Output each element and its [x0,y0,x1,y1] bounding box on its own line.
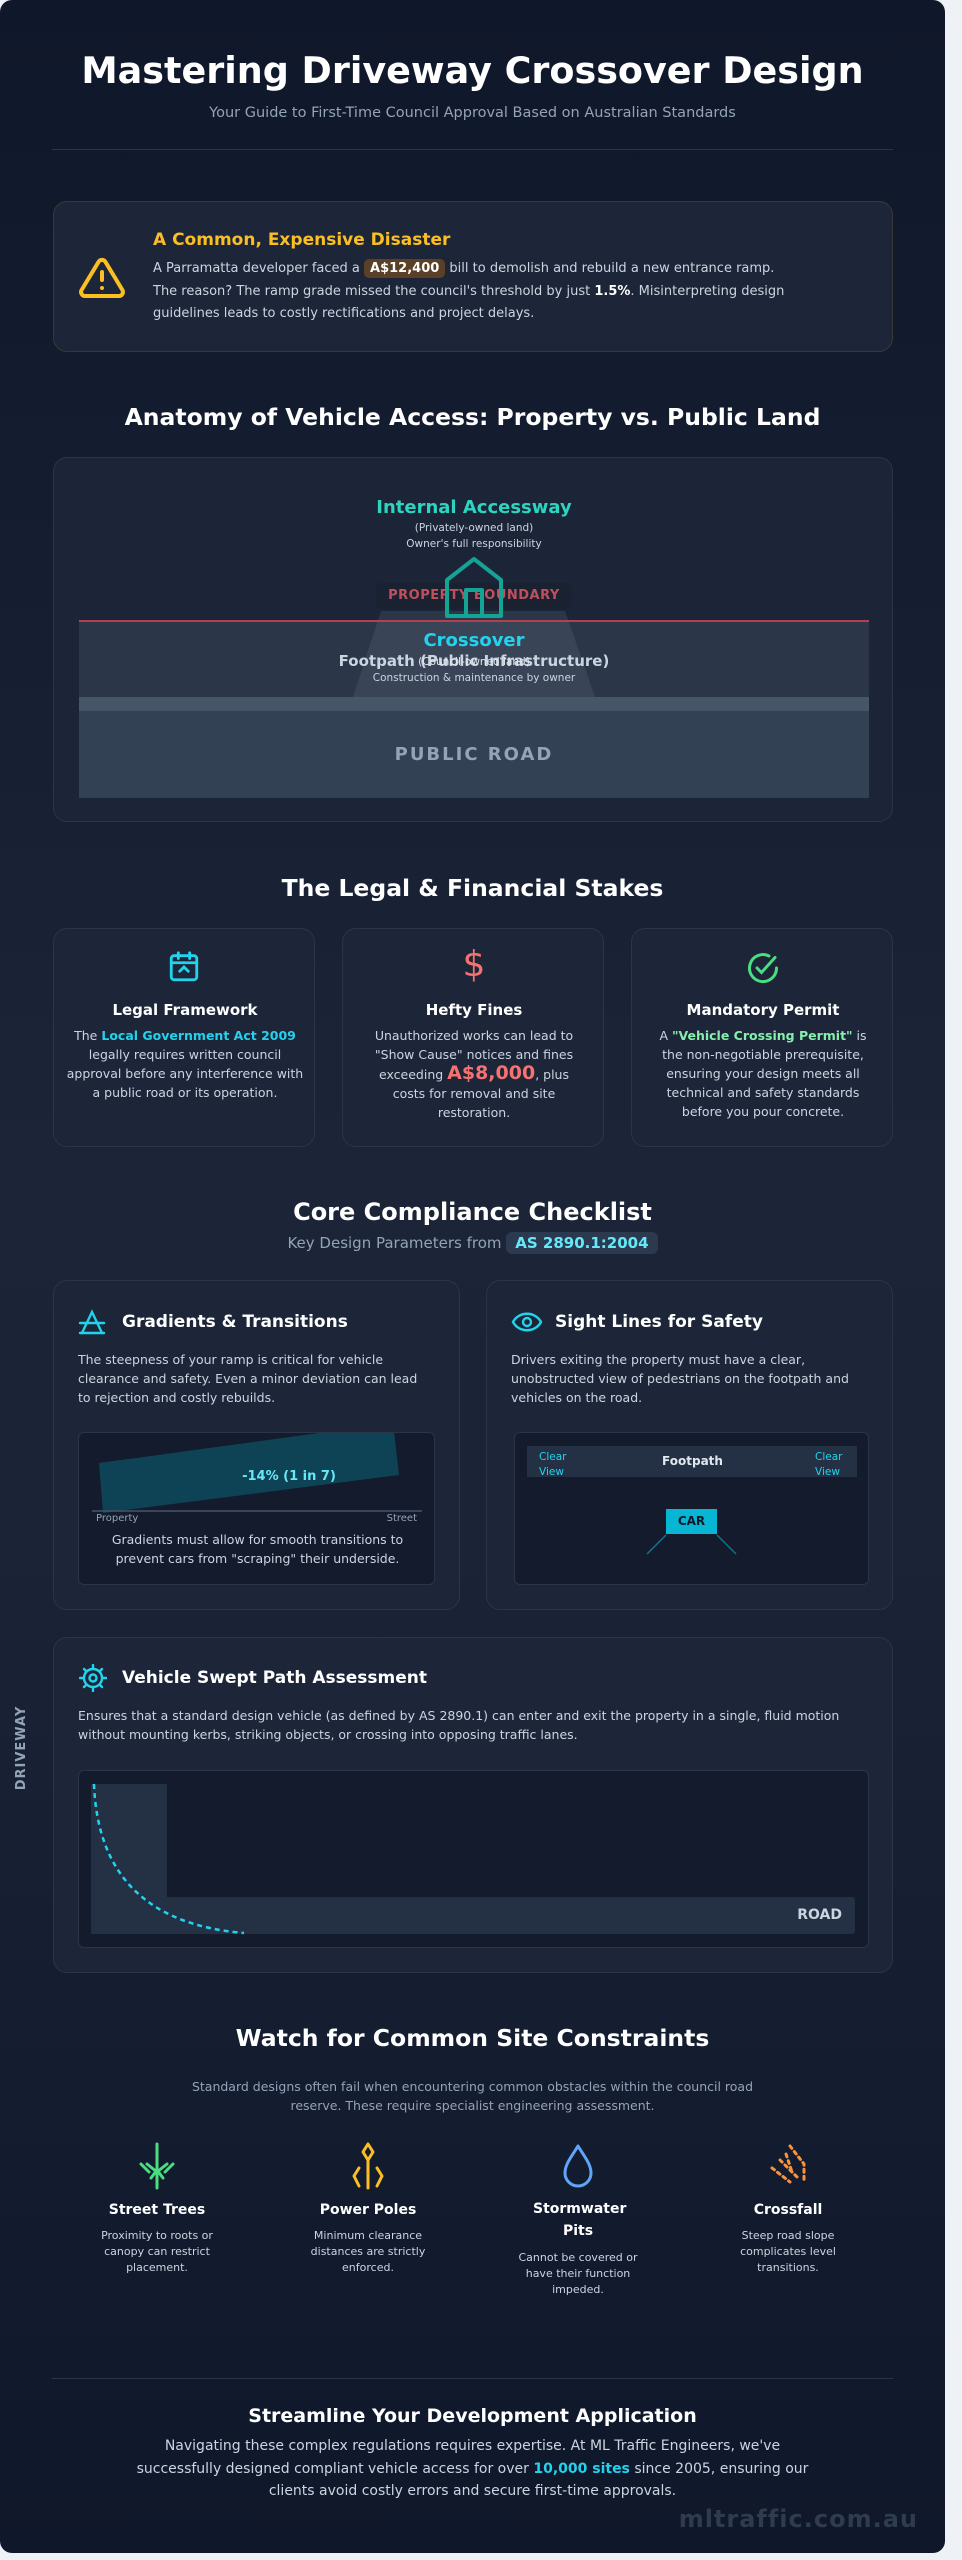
constraint: stormwater pits: Stormwater Pits [533,2201,626,2239]
panel: sight lines [486,1280,893,1610]
icon: house [445,557,503,618]
gradient diagram: -14% (1 in 7) [242,1469,336,1484]
constraint: street trees [101,2142,213,2274]
constraint: power poles: Power Poles [320,2202,416,2218]
icon: check circle [748,953,778,984]
subtitle: Your Guide to First-Time Council Approval Based on Australian Standards [209,105,736,121]
panel: swept path: Vehicle Swept Path Assessment [122,1668,427,1688]
sight diagram: Footpath [662,1454,723,1468]
footer text [137,2438,808,2499]
panel: legal framework: The Local Government Act 2009 legally requires written council approval before any interference with a public road or its operation. [67,1028,303,1100]
public road: PUBLIC ROAD [395,744,553,765]
heading: legal stakes: The Legal & Financial Stakes [282,874,663,902]
gradient diagram: Property [96,1513,138,1524]
constraint: crossfall: Steep road slope complicates level transitions. [740,2229,836,2274]
subheading with badge: Key Design Parameters from AS 2890.1:2004 [287,1234,649,1252]
crossover label: Crossover [423,630,525,651]
alert panel [53,201,893,352]
constraint: power poles: Minimum clearance distances are strictly enforced. [311,2229,425,2274]
swept path diagram [78,1770,869,1948]
constraint: stormwater pits: Cannot be covered or have their function impeded. [518,2251,638,2296]
panel: mandatory permit [631,928,893,1147]
property boundary label [376,583,572,609]
gradient diagram: Street [387,1513,417,1524]
panel: mandatory permit: Mandatory Permit [687,1001,839,1019]
internal accessway label [376,497,572,550]
panel: swept path [53,1637,893,1973]
icon: calendar [170,951,198,982]
panel: gradients: The steepness of your ramp is critical for vehicle clearance and safety. Even a minor deviation can lead to rejection and costly rebuilds. [78,1352,417,1405]
sight diagram: Clear [539,1451,566,1463]
panel: anatomy diagram [53,457,893,822]
footer text: Navigating these complex regulations requires expertise. At ML Traffic Engineers, we've [165,2438,780,2454]
constraint: stormwater pits [518,2144,638,2296]
panel: legal framework: Legal Framework [112,1001,258,1019]
public road [79,711,869,798]
sight diagram [514,1432,869,1585]
vertical driveway label: DRIVEWAY [14,1706,29,1790]
watermark: mltraffic.com.au [679,2505,918,2533]
crossover trapezoid [353,611,595,697]
panel: hefty fines [342,928,604,1147]
panel: swept path: Ensures that a standard design vehicle (as defined by AS 2890.1) can enter and exit the property in a single, fluid motion without mounting kerbs, striking objects, or crossing into opposing traffic lanes. [78,1708,839,1742]
footer text: successfully designed compliant vehicle access for over 10,000 sites since 2005, ensuring our clients avoid costly errors and secure first-time approvals. [137,2460,808,2499]
gradient diagram: Gradients must allow for smooth transitions to prevent cars from "scraping" their underside. [112,1532,403,1566]
constraints intro: Standard designs often fail when encountering common obstacles within the council road reserve. These require specialist engineering assessment. [192,2079,753,2113]
icon: gradient [78,1309,106,1334]
panel: gradients: Gradients & Transitions [122,1312,348,1332]
panel: anatomy diagram: Construction & maintenance by owner [373,672,575,684]
panel: gradients [53,1280,460,1610]
internal accessway label: Owner's full responsibility [406,538,542,550]
footer heading: Streamline Your Development Application [248,2405,697,2427]
constraint: crossfall [740,2144,836,2274]
panel: hefty fines: Hefty Fines [426,1001,522,1019]
icon: warning [79,258,125,298]
constraint: street trees: Street Trees [109,2202,205,2218]
heading: site constraints: Watch for Common Site Constraints [236,2024,709,2052]
constraint: power poles [311,2142,425,2274]
icon: gear [79,1664,107,1692]
footpath label: Footpath (Public Infrastructure) [339,652,609,670]
panel: legal framework [53,928,315,1147]
panel: anatomy diagram: (Council-owned land) [418,656,530,668]
property boundary line [79,620,869,622]
constraint: street trees: Proximity to roots or canopy can restrict placement. [101,2229,213,2274]
alert text [152,259,784,321]
icon: eye [512,1312,542,1332]
heading: compliance checklist: Core Compliance Checklist [293,1198,652,1226]
swept path diagram: ROAD [797,1907,842,1923]
constraint: crossfall: Crossfall [754,2202,822,2218]
panel: sight lines: Sight Lines for Safety [555,1312,763,1332]
curb [79,697,869,711]
alert text: The reason? The ramp grade missed the council's threshold by just 1.5%. Misinterpreting design guidelines leads to costly rectifications and project delays. [153,284,784,321]
panel: sight lines: Drivers exiting the property must have a clear, unobstructed view of pedestrians on the footpath and vehicles on the road. [511,1352,849,1405]
footpath band [79,621,869,697]
heading: anatomy: Anatomy of Vehicle Access: Property vs. Public Land [125,403,820,431]
property boundary label: PROPERTY BOUNDARY [388,588,560,603]
alert heading: A Common, Expensive Disaster [153,230,450,250]
internal accessway label: (Privately-owned land) [415,522,533,534]
alert text: A Parramatta developer faced a A$12,400 bill to demolish and rebuild a new entrance ramp. [153,261,774,276]
car box [666,1509,717,1534]
sight diagram: View [539,1466,564,1478]
internal accessway label: Internal Accessway [376,497,572,518]
car box: CAR [678,1514,705,1528]
sight diagram: View [815,1466,840,1478]
panel: mandatory permit: A "Vehicle Crossing Permit" is the non-negotiable prerequisite, ensuring your design meets all technical and safety standards before you pour concrete. [659,1028,867,1119]
gradient diagram [78,1432,435,1585]
icon: dollar: $ [463,944,485,985]
panel: hefty fines: Unauthorized works can lead to "Show Cause" notices and fines exceeding A$8,000, plus costs for removal and site restoration. [375,1028,573,1120]
sight diagram: Clear [815,1451,842,1463]
title: Mastering Driveway Crossover Design [81,49,864,92]
